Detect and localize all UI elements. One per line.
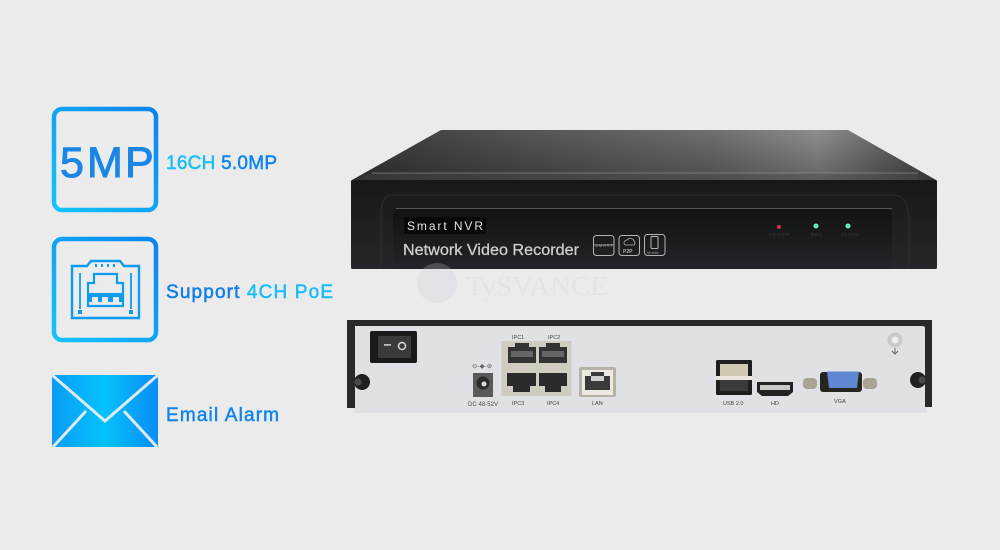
VGA port: VGA bbox=[834, 399, 846, 405]
icon: email envelope bbox=[52, 375, 158, 447]
LAN port bbox=[579, 367, 616, 407]
label: Email Alarm: Email Alarm bbox=[166, 405, 279, 426]
frame screw: right bbox=[910, 372, 926, 388]
power switch bbox=[370, 331, 417, 363]
indicator lights bbox=[769, 224, 859, 237]
icons: Smart P2P Mobile bbox=[594, 234, 665, 256]
icons: Smart P2P Mobile: Mobile bbox=[647, 250, 660, 255]
feature: 5MP icon bbox=[54, 109, 156, 210]
watermark: TySVANCE bbox=[417, 263, 608, 303]
top cover bbox=[352, 130, 936, 180]
chassis frame bbox=[347, 320, 932, 408]
feature: 5MP icon: 5MP bbox=[60, 139, 154, 187]
USB 2.0 ports bbox=[716, 360, 752, 407]
DC power jack: ⊖-◆-⊕ bbox=[472, 363, 493, 370]
badge: Smart NVR: Smart NVR bbox=[407, 219, 483, 233]
feature: PoE network port icon bbox=[54, 239, 156, 340]
ground screw bbox=[888, 332, 902, 354]
PoE ports IPC1-IPC4 bbox=[502, 335, 572, 407]
label: Support 4CH PoE: Support 4CH PoE bbox=[166, 282, 333, 303]
metal plate bbox=[354, 325, 927, 413]
product: NVR front view bbox=[351, 130, 937, 269]
title: Network Video Recorder: Network Video Recorder bbox=[403, 242, 579, 259]
indicator lights: POWER bbox=[769, 232, 790, 237]
DC power jack bbox=[468, 363, 498, 408]
USB 2.0 ports: USB 2.0 bbox=[723, 401, 743, 407]
frame screw: left bbox=[354, 374, 370, 390]
icons: Smart P2P Mobile: P2P bbox=[623, 249, 633, 255]
icons: Smart P2P Mobile: SMART bbox=[595, 243, 613, 248]
recessed front panel bbox=[381, 195, 909, 269]
PoE ports IPC1-IPC4: IPC1 bbox=[512, 335, 524, 341]
label: 16CH 5.0MP: 16CH 5.0MP bbox=[166, 153, 277, 174]
VGA port bbox=[803, 372, 877, 405]
indicator lights: REC bbox=[811, 232, 823, 237]
DC power jack: DC 48-52V bbox=[468, 402, 498, 408]
PoE ports IPC1-IPC4: IPC3 bbox=[512, 401, 524, 407]
indicator lights: ALARM bbox=[841, 232, 859, 237]
PoE ports IPC1-IPC4: IPC2 bbox=[548, 335, 560, 341]
PoE ports IPC1-IPC4: IPC4 bbox=[547, 401, 559, 407]
HDMI port bbox=[757, 382, 793, 407]
product: NVR rear panel bbox=[347, 320, 932, 413]
front face bbox=[351, 180, 937, 269]
watermark: TySVANCE: TySVANCE bbox=[466, 271, 608, 301]
HDMI port: HD bbox=[771, 401, 779, 407]
LAN port: LAN bbox=[592, 401, 603, 407]
